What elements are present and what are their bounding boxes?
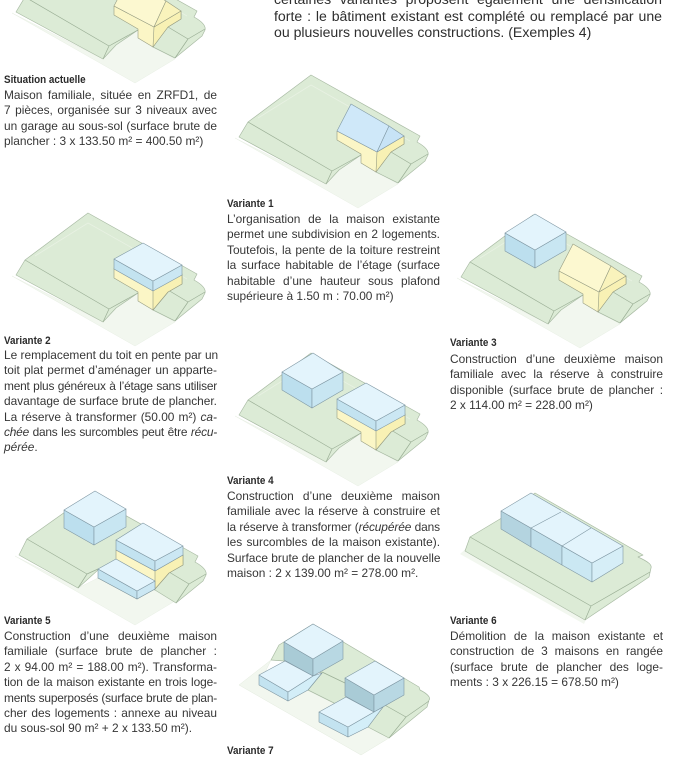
text: variante 5: ments superposés (surface brute de plan- <box>4 691 217 705</box>
diagram: variante 2 <box>12 213 205 346</box>
intro text: forte : le bâtiment existant est complété ou remplacé par une <box>274 8 662 24</box>
text: variante 1: permet une subdivision en 2 logements. <box>227 227 440 241</box>
heading: variante 2: Variante 2 <box>4 335 51 347</box>
diagram: variante 3 <box>457 214 650 348</box>
heading: variante 5: Variante 5 <box>4 615 51 627</box>
text: variante 1 <box>227 212 440 303</box>
text: situation actuelle: Maison familiale, située en ZRFD1, de <box>4 88 217 102</box>
text: variante 4: les surcombles de la maison existante). <box>227 535 440 549</box>
text: variante 1: la surface habitable de l’étage (surface <box>227 258 440 272</box>
diagram: variante 5 <box>15 491 206 625</box>
text: variante 6: Démolition de la maison existante et <box>450 629 663 643</box>
intro text: ou plusieurs nouvelles constructions. (Exemples 4) <box>274 24 591 40</box>
diagram: variante 1 <box>235 75 428 208</box>
text: variante 5: familiale (surface brute de plancher : <box>4 644 217 658</box>
text: variante 4: Surface brute de plancher de la nouvelle <box>227 551 441 565</box>
text: variante 3 <box>450 352 663 412</box>
text: variante 2: chée dans les surcombles peut être récu- <box>4 425 217 439</box>
text: variante 6: ments : 3 x 226.15 = 678.50 m²) <box>450 675 619 689</box>
heading: variante 3: Variante 3 <box>450 337 497 349</box>
text: variante 1: Toutefois, la pente de la toiture restreint <box>227 243 440 257</box>
text: situation actuelle: 7 pièces, organisée sur 3 niveaux avec <box>4 103 217 117</box>
text: variante 5: tion de la maison existante en trois loge- <box>4 675 217 689</box>
text: variante 2: toit plat permet d’aménager un apparte- <box>4 363 217 377</box>
text: variante 5: cher des logements : annexe au niveau <box>4 706 217 720</box>
text: variante 1: supérieure à 1.50 m : 70.00 m²) <box>227 289 394 303</box>
heading: variante 7: Variante 7 <box>227 745 274 757</box>
text: variante 2: La réserve à transformer (50.00 m²) ca- <box>4 410 217 424</box>
text: variante 1: L’organisation de la maison existante <box>227 212 440 226</box>
text: situation actuelle: un garage au sous-sol (surface brute de <box>4 119 217 133</box>
text: variante 4: maison : 2 x 139.00 m² = 278.00 m². <box>227 566 418 580</box>
text: variante 2: pérée. <box>4 440 38 454</box>
text: variante 4: Construction d’une deuxième maison <box>227 489 440 503</box>
text: variante 5 <box>4 629 217 735</box>
text: variante 6: construction de 3 maisons en rangée <box>450 644 663 658</box>
text: variante 5: du sous-sol 90 m² + 2 x 133.50 m²). <box>4 721 192 735</box>
text: situation actuelle <box>4 88 217 148</box>
text: variante 6 <box>450 629 663 689</box>
diagram: situation actuelle <box>12 0 205 83</box>
text: variante 4 <box>227 489 441 580</box>
heading: situation actuelle: Situation actuelle <box>4 74 86 86</box>
text: variante 3: 2 x 114.00 m² = 228.00 m²) <box>450 398 593 412</box>
heading: variante 1: Variante 1 <box>227 198 274 210</box>
intro text <box>274 0 662 40</box>
heading: variante 4: Variante 4 <box>227 475 274 487</box>
diagram: variante 7 <box>239 624 430 755</box>
text: variante 2: Le remplacement du toit en pente par un <box>4 348 218 362</box>
text: variante 5: 2 x 94.00 m² = 188.00 m²). Transforma- <box>4 660 217 674</box>
text: variante 3: disponible (surface brute de plancher : <box>450 383 663 397</box>
diagram: variante 4 <box>235 353 428 486</box>
diagram: variante 6 <box>460 493 651 624</box>
text: situation actuelle: plancher : 3 x 133.50 m² = 400.50 m²) <box>4 134 203 148</box>
heading: variante 6: Variante 6 <box>450 615 497 627</box>
text: variante 6: (surface brute de plancher des loge- <box>450 660 663 674</box>
text: variante 4: la réserve à transformer (récupérée dans <box>227 520 440 534</box>
text: variante 3: Construction d’une deuxième maison <box>450 352 663 366</box>
text: variante 2: ment plus généreux à l’étage sans utiliser <box>4 379 217 393</box>
text: variante 2: davantage de surface brute de plancher. <box>4 394 217 408</box>
text: variante 5: Construction d’une deuxième maison <box>4 629 217 643</box>
text: variante 4: familiale avec la réserve à construire et <box>227 504 440 518</box>
text: variante 3: familiale avec la réserve à construire <box>450 367 663 381</box>
text: variante 1: habitable d’une hauteur sous plafond <box>227 274 440 288</box>
text: variante 2 <box>4 348 218 454</box>
